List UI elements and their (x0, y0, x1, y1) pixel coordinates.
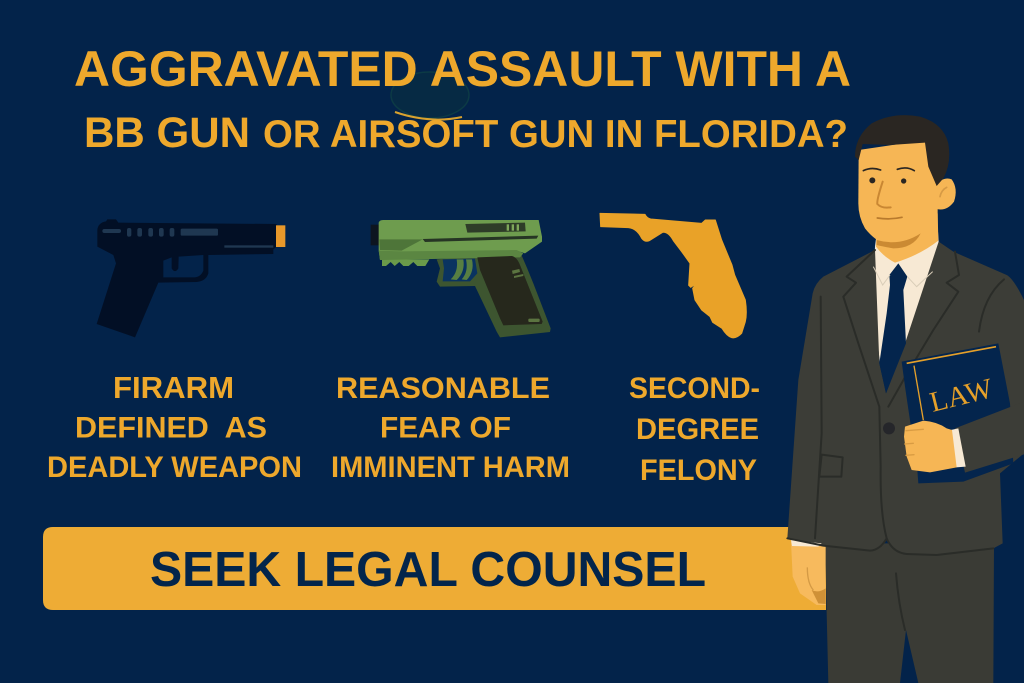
collar and lapel lines (787, 250, 1004, 630)
jaw shadow (877, 233, 921, 248)
illustration: lawyer in suit holding law book (787, 115, 1024, 683)
ear (933, 179, 956, 210)
right sleeve (955, 402, 1024, 473)
label: firearm defined as deadly weapon (47, 370, 302, 484)
facial features (863, 168, 947, 219)
neck (876, 213, 938, 263)
law book (902, 343, 1013, 483)
trousers (825, 543, 994, 683)
title: BB GUN (84, 109, 250, 157)
label: second-degree felony: SECOND- (629, 372, 760, 405)
label: firearm defined as deadly weapon: DEFINED AS (75, 412, 267, 444)
shirt cuff left (791, 540, 822, 547)
tie (879, 263, 907, 393)
label: firearm defined as deadly weapon: FIRARM (113, 370, 234, 405)
icon: Florida map (600, 213, 746, 338)
icon: black firearm (97, 219, 285, 337)
label: reasonable fear of imminent harm (331, 372, 570, 484)
call-to-action banner (43, 527, 826, 610)
title (74, 41, 851, 157)
label: second-degree felony: DEGREE (636, 413, 759, 446)
title: AGGRAVATED ASSAULT WITH A (74, 41, 851, 97)
right hand (904, 421, 957, 472)
left hand (791, 542, 826, 605)
jacket (787, 242, 1024, 555)
law book: LAW (927, 372, 996, 419)
label: reasonable fear of imminent harm: IMMINENT HARM (331, 451, 570, 484)
label: firearm defined as deadly weapon: DEADLY WEAPON (47, 451, 302, 484)
title: OR AIRSOFT GUN IN FLORIDA? (263, 113, 848, 156)
label: second-degree felony (629, 372, 760, 487)
smudge behind title (391, 72, 469, 120)
call-to-action banner: SEEK LEGAL COUNSEL (150, 543, 706, 597)
icon: green airsoft gun (371, 220, 551, 337)
neck and shirt (873, 227, 939, 363)
label: second-degree felony: FELONY (640, 454, 757, 487)
face (858, 140, 938, 248)
label: reasonable fear of imminent harm: REASONABLE (336, 372, 550, 405)
label: reasonable fear of imminent harm: FEAR OF (380, 412, 511, 444)
right cuff (951, 428, 966, 467)
hair (855, 115, 949, 186)
